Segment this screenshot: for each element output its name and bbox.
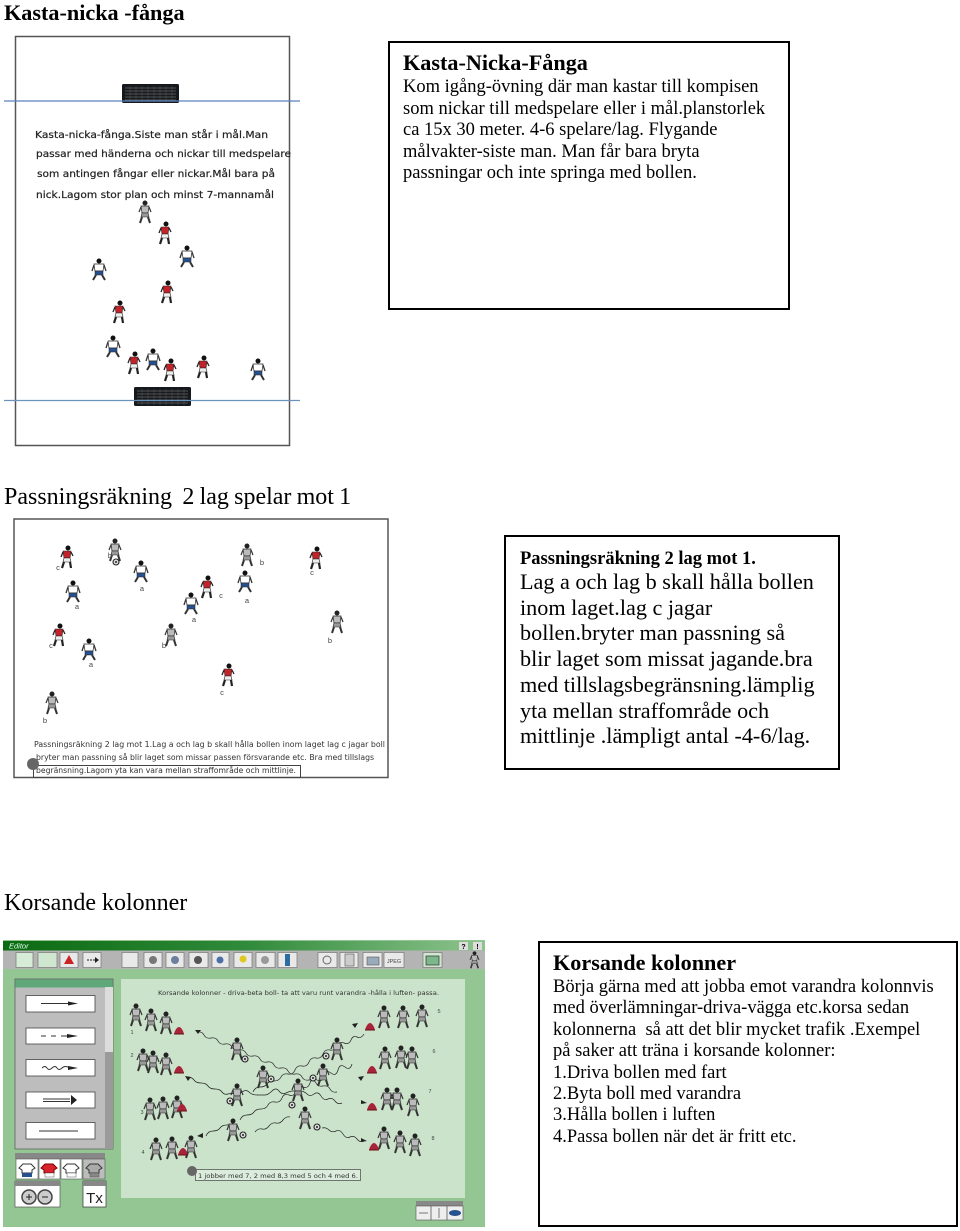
text box: passningsräkning: blir laget som missat jagande.bra xyxy=(520,646,813,671)
illustration: kasta-nicka-fånga field xyxy=(4,36,300,446)
text box: korsande kolonner: med överlämningar-driva-vägga etc.korsa sedan xyxy=(553,998,909,1018)
team letters: c xyxy=(220,688,224,697)
text box: passningsräkning: bollen.bryter man passning så xyxy=(520,620,785,645)
note box: 1 jobber med 7, 2 med 8,3 med 5 och 4 med 6. xyxy=(198,1173,358,1180)
middle players xyxy=(227,1038,343,1141)
diagram caption: Kasta-nicka-fånga.Siste man står i mål.Man xyxy=(35,130,268,141)
column numbers: 3 xyxy=(140,1110,144,1116)
panel: line tools xyxy=(15,979,113,1149)
title bar: Editor xyxy=(9,942,29,950)
diagram caption: bryter man passning så blir laget som missar passen försvarande etc. Bra med tillslags xyxy=(36,753,374,762)
text box: kasta-nicka-fånga: Kom igång-övning där man kastar till kompisen xyxy=(403,77,759,97)
text box: korsande kolonner: på saker att träna i korsande kolonner: xyxy=(553,1041,836,1061)
illustration: korsande kolonner editor screenshot xyxy=(3,940,485,1227)
text box: passningsräkning: med tillslagsbegränsning.lämplig xyxy=(520,672,815,697)
column numbers: 8 xyxy=(431,1136,435,1142)
players xyxy=(92,200,265,381)
team letters: a xyxy=(89,660,94,669)
column numbers: 7 xyxy=(428,1089,432,1095)
heading: passningsräkning: Passningsräkning 2 lag spelar mot 1 xyxy=(4,484,351,510)
column numbers xyxy=(130,1009,441,1156)
team letters: a xyxy=(245,596,250,605)
right columns xyxy=(365,1004,428,1156)
title bar xyxy=(3,941,485,951)
heading: korsande kolonner: Korsande kolonner xyxy=(4,890,187,916)
team letters: a xyxy=(192,615,197,624)
diagram caption: nick.Lagom stor plan och minst 7-mannamål xyxy=(36,190,274,201)
team letters: b xyxy=(162,641,166,650)
column numbers: 2 xyxy=(130,1053,134,1059)
title bar: ? xyxy=(461,944,466,951)
title bar: ! xyxy=(476,944,479,951)
players xyxy=(46,538,343,714)
diagram caption: Passningsräkning 2 lag mot 1.Lag a och lag b skall hålla bollen inom laget lag c jagar boll xyxy=(34,740,385,749)
panel: jerseys xyxy=(15,1153,105,1179)
toolbar xyxy=(3,950,485,1048)
text box: kasta-nicka-fånga: som nickar till medspelare eller i mål.planstorlek xyxy=(403,98,765,118)
column numbers: 1 xyxy=(130,1030,134,1036)
team letters: b xyxy=(260,558,264,567)
heading: kasta-nicka-fånga: Kasta-nicka -fånga xyxy=(4,0,185,25)
column numbers: 5 xyxy=(437,1009,441,1015)
team letters: c xyxy=(310,568,314,577)
team letters: b xyxy=(43,716,47,725)
team letters: c xyxy=(49,641,53,650)
text box: kasta-nicka-fånga: målvakter-siste man. Man får bara bryta xyxy=(403,142,700,162)
text box: passningsräkning: Lag a och lag b skall hålla bollen xyxy=(520,569,814,594)
text box: korsande kolonner: kolonnerna så att det blir mycket trafik .Exempel xyxy=(553,1020,920,1040)
diagram caption xyxy=(34,740,385,775)
team letters: c xyxy=(56,563,60,572)
text box: passningsräkning xyxy=(504,535,840,770)
team letters: b xyxy=(328,636,332,645)
field title: Korsande kolonner - driva-beta boll- ta att varu runt varandra -hålla i luften- passa. xyxy=(158,990,439,997)
panel: text tool: Tx xyxy=(86,1190,103,1207)
illustration: passningsräkning field xyxy=(14,519,388,778)
icon: bottom goal xyxy=(134,387,191,406)
team letters: a xyxy=(75,602,80,611)
text box: passningsräkning: Passningsräkning 2 lag mot 1. xyxy=(520,549,756,569)
crossing dribble lines xyxy=(187,1032,364,1142)
text box: passningsräkning: inom laget.lag c jagar xyxy=(520,595,712,620)
text box: korsande kolonner: 1.Driva bollen med fart xyxy=(553,1063,727,1083)
column numbers: 6 xyxy=(432,1049,436,1055)
icon: top goal xyxy=(122,84,179,103)
text box: kasta-nicka-fånga xyxy=(388,41,790,310)
text box: korsande kolonner: Korsande kolonner xyxy=(553,950,736,975)
team letters: a xyxy=(140,584,145,593)
text box: korsande kolonner: 4.Passa bollen när det är fritt etc. xyxy=(553,1127,796,1147)
panel: text tool xyxy=(83,1181,106,1207)
diagram caption: begränsning.Lagom yta kan vara mellan straffområde och mittlinje. xyxy=(36,766,296,775)
text box: passningsräkning: mittlinje .lämpligt antal -4-6/lag. xyxy=(520,723,810,748)
left columns xyxy=(130,1004,197,1160)
panel: zoom control xyxy=(15,1181,60,1207)
text box: korsande kolonner: 2.Byta boll med varandra xyxy=(553,1084,741,1104)
panel: drill field xyxy=(121,979,465,1198)
team letters xyxy=(43,551,332,725)
text box: korsande kolonner: Börja gärna med att jobba emot varandra kolonnvis xyxy=(553,977,934,997)
text box: passningsräkning: yta mellan straffområde och xyxy=(520,698,769,723)
marker dot xyxy=(27,758,39,770)
diagram caption xyxy=(35,130,291,201)
text box: korsande kolonner: 3.Hålla bollen i luften xyxy=(553,1105,715,1125)
text box: kasta-nicka-fånga: ca 15x 30 meter. 4-6 spelare/lag. Flygande xyxy=(403,120,717,140)
team letters: b xyxy=(108,551,112,560)
column numbers: 4 xyxy=(141,1150,145,1156)
team letters: c xyxy=(219,591,223,600)
panel: line style xyxy=(416,1201,463,1220)
note box xyxy=(187,1166,360,1180)
diagram caption: som antingen fångar eller nickar.Mål bara på xyxy=(37,169,275,180)
text box: kasta-nicka-fånga: passningar och inte springa med bollen. xyxy=(403,163,697,183)
diagram caption: passar med händerna och nickar till medspelare xyxy=(36,149,291,160)
text box: kasta-nicka-fånga: Kasta-Nicka-Fånga xyxy=(403,50,588,75)
toolbar: JPEG xyxy=(387,959,401,965)
text box: korsande kolonner xyxy=(538,941,958,1227)
